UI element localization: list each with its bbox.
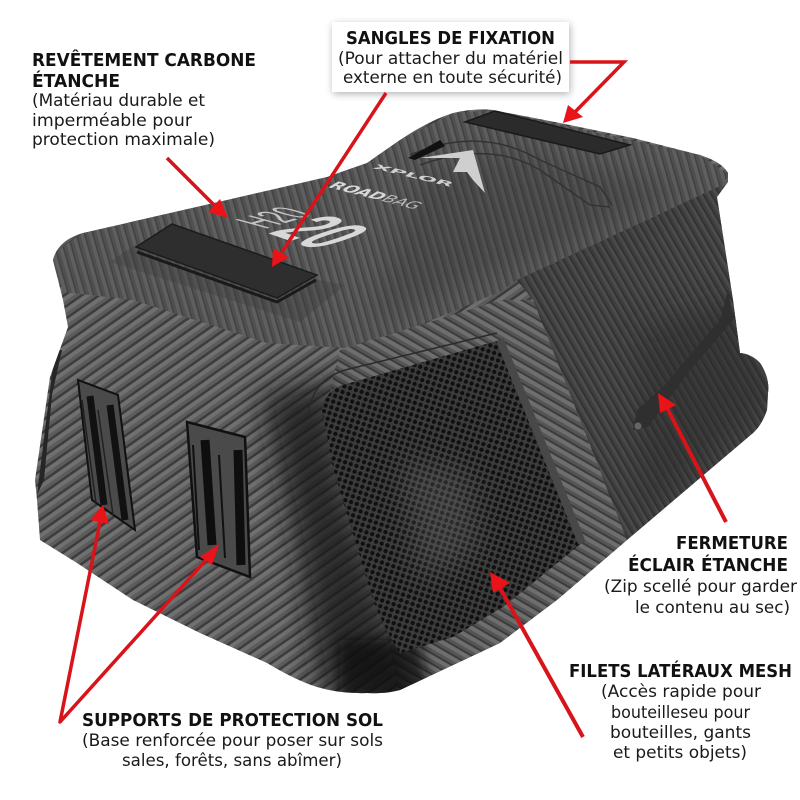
front dark shading beside mesh (262, 380, 410, 700)
top zipper pull (408, 140, 445, 160)
arrow: carbon coating (167, 158, 228, 218)
ground support pad left (78, 380, 135, 530)
heading second line: ÉTANCHE (32, 70, 120, 92)
zipper pull (634, 422, 642, 430)
top zipper (408, 140, 612, 207)
label: attachment straps box (332, 22, 570, 94)
H20 label: H20 (225, 204, 324, 232)
brand name XPLOR: XPLOR (370, 163, 457, 188)
description line two: bouteilleseu pour (611, 703, 750, 722)
heading: REVÊTEMENT CARBONE (32, 49, 256, 71)
description line one: (Base renforcée pour poser sur sols (82, 731, 383, 750)
side left mesh edge (37, 350, 62, 495)
top face (50, 110, 730, 348)
label: waterproof carbon coating (32, 49, 256, 149)
heading: FILETS LATÉRAUX MESH (569, 660, 792, 682)
arrow: zipper (658, 393, 726, 522)
label: side mesh (569, 660, 792, 762)
label: waterproof zipper (604, 534, 797, 617)
pad right ribs (205, 440, 241, 565)
description line two: externe en toute sécurité) (343, 68, 562, 87)
pad left rib highlights (82, 400, 113, 515)
arrow: back strap (563, 62, 624, 123)
pad left ribs (90, 396, 125, 520)
box (332, 22, 569, 92)
description line one: (Matériau durable et (32, 91, 206, 110)
top zipper seams (410, 141, 612, 207)
heading: FERMETURE (676, 534, 788, 554)
box shadow (333, 24, 570, 94)
pad right rib highlights (193, 445, 225, 558)
heading: SUPPORTS DE PROTECTION SOL (82, 711, 383, 731)
strap patch (110, 245, 345, 322)
back strap (465, 111, 630, 154)
description line one: (Pour attacher du matériel (338, 49, 563, 68)
description line one: (Zip scellé pour garder (604, 577, 797, 596)
zipper band (633, 290, 733, 430)
mesh net (322, 340, 582, 653)
front corner panel (330, 300, 627, 605)
arrows: ground supports (60, 505, 219, 722)
right side face (517, 185, 775, 545)
description line two: imperméable pour (32, 111, 192, 130)
pad right base (187, 422, 250, 577)
ground support pad right (187, 422, 250, 577)
heading second line: ÉCLAIR ÉTANCHE (628, 554, 788, 576)
label: ground protection supports (82, 711, 383, 770)
strap edge (137, 252, 316, 302)
mesh frame (500, 340, 582, 543)
brand logo mountain (420, 150, 485, 193)
side zipper (633, 290, 733, 430)
description line one: (Accès rapide pour (601, 682, 761, 701)
arrow: front strap (272, 93, 386, 267)
strap body (465, 111, 630, 154)
right side shading (640, 300, 775, 520)
mesh lighter patch (400, 460, 480, 580)
strap body (136, 224, 317, 298)
front strap (110, 224, 345, 322)
capacity 20: 20 (248, 208, 392, 257)
mesh pocket outer stitching (308, 333, 497, 415)
top face shading (381, 152, 662, 308)
pad left base (78, 380, 135, 530)
description line three: bouteilles, gants (610, 723, 751, 742)
lower corner dark shading (340, 640, 430, 700)
bottom band (390, 540, 627, 695)
ROADBAG label: ROADBAG (324, 179, 427, 211)
bag illustration (35, 109, 775, 700)
bag surfaces clipped to silhouette (37, 110, 775, 700)
description line four: et petits objets) (613, 743, 747, 762)
description line two: le contenu au sec) (635, 598, 790, 617)
arrow: mesh (490, 572, 583, 737)
heading: SANGLES DE FIXATION (346, 29, 555, 49)
description line two: sales, forêts, sans abîmer) (122, 751, 342, 770)
bag silhouette (35, 109, 768, 693)
description line three: protection maximale) (32, 130, 215, 149)
side mesh pocket (308, 333, 582, 653)
